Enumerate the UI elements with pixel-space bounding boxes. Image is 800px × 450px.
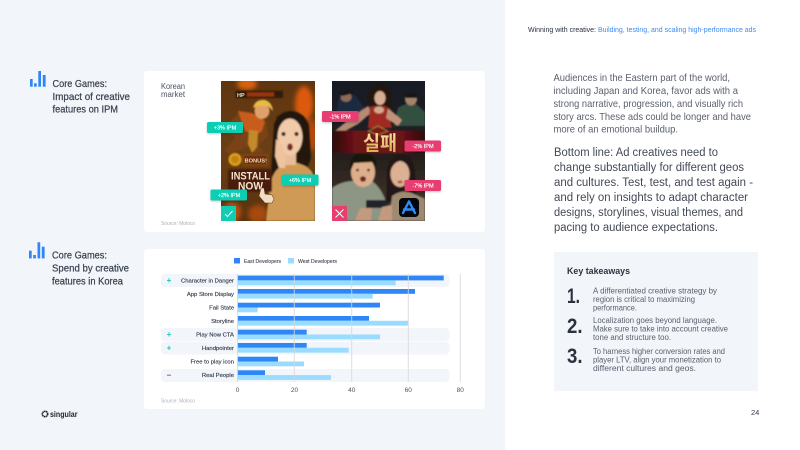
row labels: Handpointer	[202, 346, 234, 352]
text block: bottom line: pacing to audience expectations.	[554, 222, 718, 234]
positive and negative markers: +	[167, 330, 172, 339]
Korean market label: Korean	[161, 82, 185, 91]
row labels: Character in Danger	[181, 278, 234, 284]
takeaways heading: Key takeaways	[567, 266, 630, 277]
takeaway 2: 2.	[567, 315, 582, 338]
Korean market label	[161, 82, 186, 99]
badge: +2% IPM	[210, 190, 247, 200]
badge: -2% IPM	[404, 140, 441, 152]
row labels: App Store Display	[187, 292, 234, 298]
badge: +2% IPM: +2% IPM	[218, 193, 241, 199]
image: winning ad: INSTALL	[231, 170, 270, 182]
takeaway 1: A differentiated creative strategy by	[593, 286, 717, 296]
text block: bottom line	[554, 147, 753, 234]
text block: audiences: strong narrative, progression, and visually rich	[554, 98, 743, 110]
text block: audiences	[554, 72, 751, 136]
panel: key takeaways	[554, 252, 758, 391]
takeaway 2: tone and structure too.	[593, 333, 671, 342]
legend: East Developers	[244, 259, 281, 265]
highlighted row backgrounds	[161, 274, 450, 382]
header: Winning with creative:	[528, 25, 596, 34]
takeaway 3	[567, 345, 725, 373]
takeaway 3: 3.	[567, 345, 582, 368]
badge: +3% IPM: +3% IPM	[214, 126, 237, 132]
icon: check	[221, 206, 236, 221]
takeaway 2: Make sure to take into account creative	[593, 324, 729, 334]
icon: bar chart	[30, 71, 46, 87]
HP bar	[236, 91, 283, 98]
left background	[0, 0, 505, 450]
takeaway 1	[567, 285, 717, 312]
logo: singular: singular	[50, 410, 78, 419]
badge: -1% IPM: -1% IPM	[329, 114, 351, 120]
takeaway 1: performance.	[593, 304, 637, 312]
heading: spend by creative features in Korea	[29, 242, 129, 288]
woman	[271, 111, 311, 176]
man	[332, 181, 388, 221]
text block: bottom line: Bottom line: Ad creatives need to	[554, 147, 718, 159]
takeaway 3: different cultures and geos.	[593, 364, 696, 373]
button	[228, 169, 272, 192]
pointing hand	[259, 188, 274, 203]
woman	[386, 162, 416, 203]
text block: bottom line: change substantially for different geos	[554, 162, 744, 174]
positive and negative markers	[167, 276, 172, 376]
coin and bonus box	[243, 155, 268, 165]
text block: audiences: more of an emotional buildup.	[554, 124, 678, 136]
heading: impact of creative features on IPM	[30, 71, 130, 116]
row labels: Play Now CTA	[196, 332, 234, 338]
heading text	[52, 78, 130, 116]
text block: bottom line: and rely on insights to adapt character	[554, 192, 748, 204]
image: winning ad: BONUS!	[244, 158, 267, 164]
page number: 24	[751, 408, 759, 417]
characters on top	[336, 94, 364, 113]
Korean market label: market	[161, 90, 186, 99]
badge: -2% IPM: -2% IPM	[412, 144, 434, 150]
axis labels: 80	[457, 387, 464, 394]
badge: -1% IPM	[322, 111, 358, 122]
row labels: Real People	[202, 373, 235, 379]
heading text: Core Games:	[52, 250, 107, 262]
badge: +6% IPM: +6% IPM	[289, 178, 312, 184]
axis labels: 60	[405, 387, 412, 394]
phone and hands	[366, 200, 388, 208]
source: Source: Moloco	[161, 221, 195, 227]
image: winning ad: NOW	[238, 180, 264, 192]
hero character	[224, 111, 268, 154]
badge: -7% IPM: -7% IPM	[412, 184, 434, 190]
row labels: Free to play icon	[190, 359, 234, 365]
heading text	[52, 250, 129, 288]
image: winning ad	[221, 78, 317, 223]
axis labels: 40	[348, 387, 356, 394]
image: losing ad	[332, 81, 425, 221]
takeaway 3: To harness higher conversion rates and	[593, 347, 725, 356]
grid lines	[238, 274, 460, 382]
icon: cross	[332, 206, 347, 221]
row labels: Storyline	[211, 319, 235, 325]
row labels: Fail State	[209, 306, 235, 312]
badge: +6% IPM	[282, 174, 318, 186]
axis labels	[236, 387, 464, 394]
heading text: Impact of creative	[52, 91, 130, 103]
takeaway 2	[567, 315, 729, 342]
takeaway 1: 1.	[567, 285, 580, 308]
icon: bar chart	[29, 242, 45, 258]
heading text: Spend by creative	[52, 262, 129, 274]
heading text: features in Korea	[52, 276, 123, 288]
legend	[234, 258, 337, 265]
text block: bottom line: and cultures. Test, test, and test again -	[554, 177, 753, 189]
room background	[332, 153, 425, 206]
takeaway 3: player LTV, align your monetization to	[593, 356, 722, 364]
icon: app store	[399, 198, 419, 217]
legend: West Developers	[298, 259, 337, 265]
axis labels: 0	[236, 387, 240, 394]
image: winning ad: HP	[237, 93, 245, 99]
banner title: 실패	[363, 132, 397, 155]
heading text: Core Games:	[52, 78, 107, 90]
positive and negative markers: +	[167, 343, 172, 352]
header: Building, testing, and scaling high-performance ads	[598, 25, 756, 34]
bars: West Developers	[238, 280, 408, 380]
text block: audiences: story arcs. These ads could be longer and have	[554, 111, 751, 123]
axis labels: 20	[291, 387, 298, 394]
text block: audiences: including Japan and Korea, favor ads with a	[554, 85, 738, 97]
panel: Korean market creatives	[144, 71, 485, 232]
panel: spend bar chart	[144, 249, 485, 409]
banner	[332, 130, 425, 153]
heading text: features on IPM	[52, 104, 118, 116]
text block: bottom line: designs, storylines, visual themes, and	[554, 207, 743, 219]
bars: East Developers	[238, 276, 444, 375]
positive and negative markers: +	[167, 276, 172, 285]
row labels	[181, 278, 235, 379]
badge: -7% IPM	[404, 180, 441, 191]
takeaway 2: Localization goes beyond language.	[593, 316, 717, 325]
takeaway 1: region is critical to maximizing	[593, 295, 695, 304]
source: Source: Moloco	[161, 398, 195, 404]
badge: +3% IPM	[207, 122, 243, 133]
text block: audiences: Audiences in the Eastern part of the world,	[554, 72, 730, 84]
header	[528, 25, 756, 34]
